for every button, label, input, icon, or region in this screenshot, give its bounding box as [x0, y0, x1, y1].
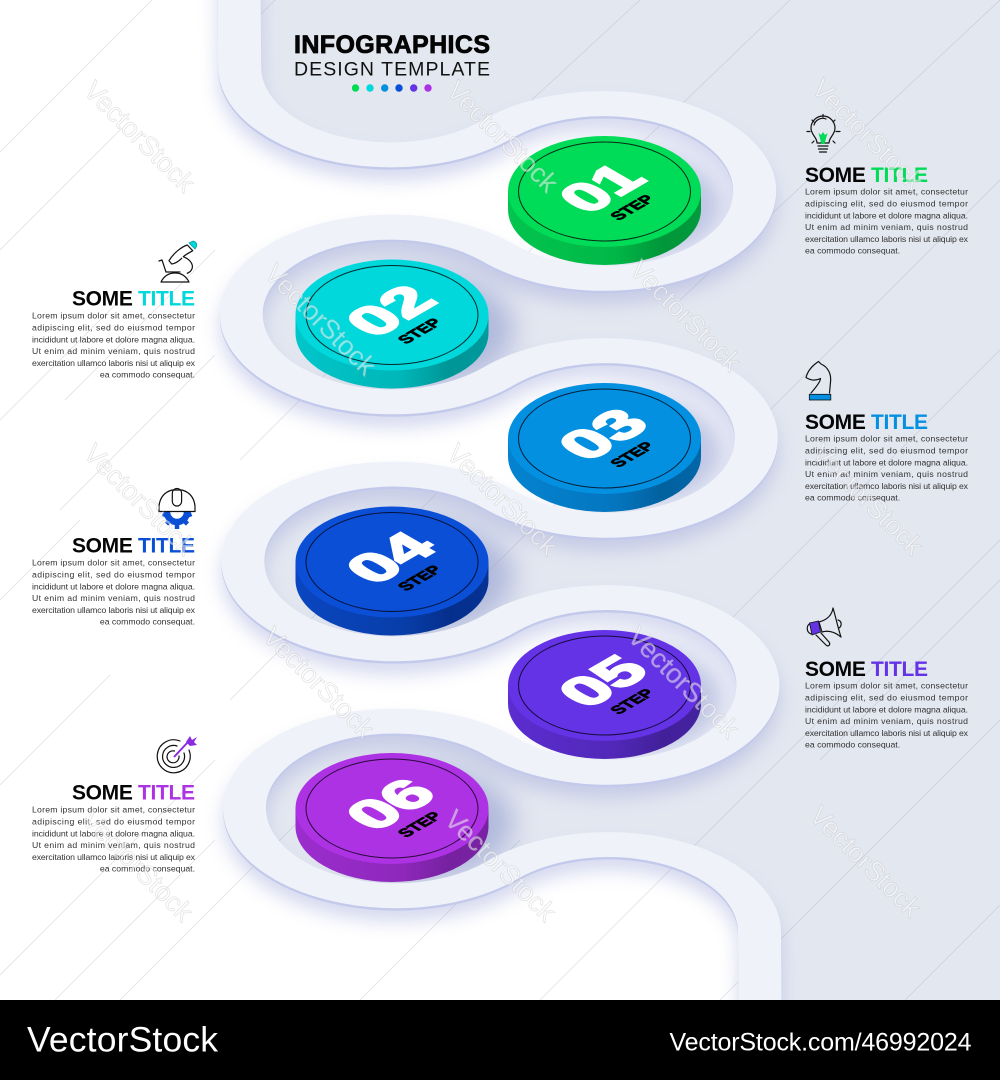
text block: step 03: Ut enim ad minim veniam, quis nostrud — [805, 469, 968, 479]
text block: step 04: SOME TITLE — [72, 534, 195, 558]
text block: step 06: exercitation ullamco laboris nisi ut aliquip ex — [32, 852, 196, 862]
icon: chess knight — [806, 362, 831, 400]
text block: step 05: incididunt ut labore et dolore magna aliqua. — [805, 704, 968, 714]
band shadow — [239, 0, 760, 1057]
text block: step 01 — [805, 164, 969, 256]
text block: step 06: Lorem ipsum dolor sit amet, consectetur — [32, 805, 195, 815]
watermarks: VectorStock — [78, 75, 201, 199]
disk 01 — [508, 136, 701, 265]
text block: step 01: exercitation ullamco laboris nisi ut aliquip ex — [805, 234, 969, 244]
text block: step 02: Lorem ipsum dolor sit amet, consectetur — [32, 311, 195, 321]
text block: step 03: exercitation ullamco laboris nisi ut aliquip ex — [805, 481, 969, 491]
text block: step 03: ea commodo consequat. — [805, 493, 900, 503]
text block: step 05: Ut enim ad minim veniam, quis nostrud — [805, 716, 968, 726]
text block: step 05: exercitation ullamco laboris nisi ut aliquip ex — [805, 728, 969, 738]
text block: step 04: Ut enim ad minim veniam, quis nostrud — [32, 593, 195, 603]
text block: step 04: incididunt ut labore et dolore magna aliqua. — [32, 581, 195, 591]
text block: step 03: incididunt ut labore et dolore magna aliqua. — [805, 457, 968, 467]
text block: step 03: adipiscing elit, sed do eiusmod tempor — [805, 446, 968, 456]
icon: helmet and gear — [159, 488, 195, 529]
disk 02: 02 — [332, 277, 450, 345]
title: INFOGRAPHICS — [294, 31, 490, 59]
footer image id: VectorStock.com/46992024 — [670, 1029, 972, 1057]
disk 06: STEP — [394, 810, 447, 840]
text block: step 06: SOME TITLE — [72, 782, 195, 804]
text block: step 03: SOME TITLE — [805, 411, 928, 434]
watermarks: VectorStock — [441, 75, 564, 199]
text block: step 05: SOME TITLE — [805, 658, 928, 681]
text block: step 02: ea commodo consequat. — [100, 370, 195, 380]
disk 02: STEP — [394, 316, 447, 347]
disk 01: 01 — [545, 155, 658, 221]
watermarks: VectorStock — [806, 73, 929, 197]
text block: step 03: Lorem ipsum dolor sit amet, consectetur — [805, 434, 968, 444]
text block: step 04: adipiscing elit, sed do eiusmod tempor — [32, 570, 195, 580]
text block: step 02: SOME TITLE — [72, 288, 195, 310]
serpentine track — [239, 0, 760, 1046]
text block: step 06: adipiscing elit, sed do eiusmod tempor — [32, 816, 195, 826]
disk 04: 04 — [332, 524, 450, 592]
text block: step 04: ea commodo consequat. — [100, 617, 195, 627]
text block: step 06: ea commodo consequat. — [100, 864, 195, 874]
text block: step 01: Ut enim ad minim veniam, quis nostrud — [805, 222, 968, 232]
text block: step 01: Lorem ipsum dolor sit amet, consectetur — [805, 187, 968, 197]
text block: step 01: adipiscing elit, sed do eiusmod tempor — [805, 198, 968, 208]
disk 05 — [508, 630, 701, 759]
watermarks: VectorStock — [622, 621, 745, 745]
disk shadows — [318, 147, 726, 881]
disk 04 — [296, 506, 488, 636]
background: white left zone — [0, 0, 760, 1044]
text block: step 01: SOME TITLE — [805, 164, 928, 187]
watermarks: VectorStock — [441, 438, 564, 562]
text block: step 05: adipiscing elit, sed do eiusmod tempor — [805, 692, 968, 702]
text block: step 02: adipiscing elit, sed do eiusmod tempor — [32, 322, 195, 332]
disk 05: 05 — [544, 647, 662, 716]
icon: microscope — [159, 241, 197, 282]
icon: target and dart — [157, 736, 197, 773]
disk 06 — [296, 753, 488, 882]
disk 03: STEP — [606, 440, 659, 470]
disk 04: STEP — [394, 563, 447, 594]
watermarks: VectorStock — [806, 438, 929, 562]
title — [294, 31, 490, 80]
text block: step 02: incididunt ut labore et dolore magna aliqua. — [32, 334, 195, 344]
text block: step 01: incididunt ut labore et dolore magna aliqua. — [805, 210, 968, 220]
disk 02 — [296, 260, 488, 388]
watermarks: VectorStock — [439, 804, 562, 928]
text block: step 02: exercitation ullamco laboris nisi ut aliquip ex — [32, 358, 196, 368]
icon: megaphone — [807, 608, 841, 646]
text block: step 05 — [805, 658, 969, 750]
watermarks: VectorStock — [804, 800, 927, 924]
disk 03 — [508, 383, 701, 512]
icon: light bulb — [807, 114, 840, 152]
text block: step 03 — [805, 411, 969, 503]
text block: step 02: Ut enim ad minim veniam, quis nostrud — [32, 346, 195, 356]
text block: step 05: ea commodo consequat. — [805, 740, 900, 750]
text block: step 06: incididunt ut labore et dolore magna aliqua. — [32, 828, 195, 838]
footer logo: VectorStock — [27, 1020, 218, 1060]
text block: step 05: Lorem ipsum dolor sit amet, consectetur — [805, 681, 968, 691]
watermarks: VectorStock — [624, 254, 747, 378]
disk 05: STEP — [606, 687, 659, 717]
track edge line — [239, 0, 760, 1046]
disk 06: 06 — [332, 770, 450, 839]
track band — [239, 0, 760, 1044]
watermarks: VectorStock — [78, 438, 201, 562]
watermarks: VectorStock — [259, 258, 382, 382]
disk 03: 03 — [544, 400, 662, 469]
watermarks: VectorStock — [76, 804, 199, 928]
watermarks: VectorStock — [257, 621, 380, 745]
text block: step 01: ea commodo consequat. — [805, 246, 900, 256]
text block: step 04: Lorem ipsum dolor sit amet, consectetur — [32, 558, 195, 568]
text block: step 06: Ut enim ad minim veniam, quis nostrud — [32, 840, 195, 850]
text block: step 04 — [32, 534, 196, 627]
footer bar — [0, 1000, 1000, 1080]
colour dots — [352, 84, 432, 92]
text block: step 06 — [32, 782, 196, 874]
disk 01: STEP — [606, 193, 659, 223]
text block: step 04: exercitation ullamco laboris nisi ut aliquip ex — [32, 605, 196, 615]
title: DESIGN TEMPLATE — [294, 58, 490, 80]
watermarks — [76, 73, 929, 928]
text block: step 02 — [32, 288, 196, 380]
